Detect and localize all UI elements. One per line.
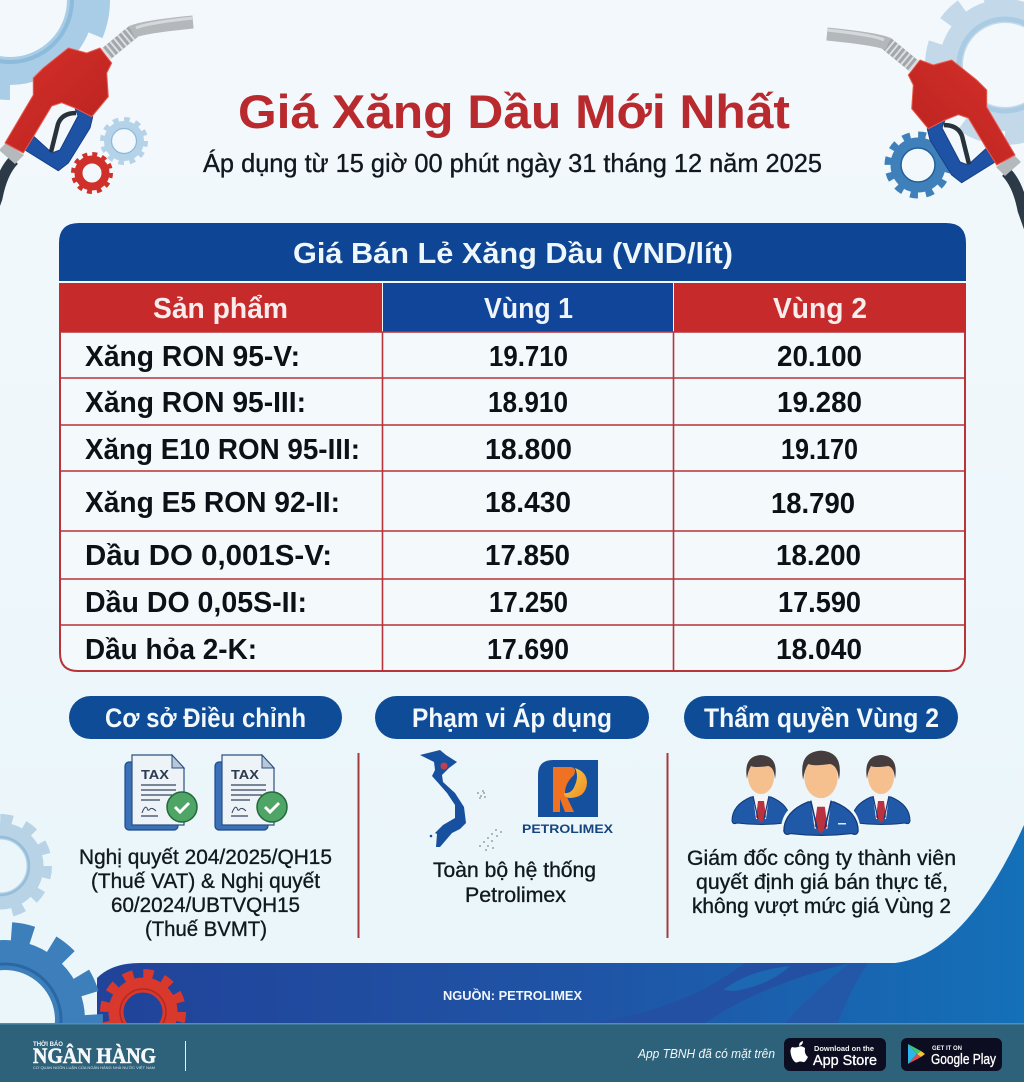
row: Dầu DO 0,05S-II: 17.250 <box>489 587 568 619</box>
row: Dầu hỏa 2-K: 17.690 <box>487 634 569 666</box>
text block <box>433 859 596 907</box>
footer logo: NGÂN HÀNG <box>33 1043 156 1068</box>
row: Xăng E10 RON 95-III: 19.170 <box>781 434 858 466</box>
heading pill: Thẩm quyền Vùng 2 <box>704 703 939 733</box>
row: Xăng E10 RON 95-III: Xăng E10 RON 95-III: <box>85 434 360 466</box>
row: Xăng RON 95-III: 18.910 <box>488 387 568 419</box>
text block: quyết định giá bán thực tế, <box>696 871 948 894</box>
table column headers: Vùng 2 <box>773 293 867 325</box>
heading pill <box>375 696 649 739</box>
icon: tax document 2 <box>215 755 287 830</box>
subtitle: Áp dụng từ 15 giờ 00 phút ngày 31 tháng 12 năm 2025 <box>203 148 822 178</box>
bottom blue wave <box>97 825 1024 1024</box>
Google Play badge: GET IT ON <box>932 1045 962 1052</box>
gear: lower left big blue <box>0 932 93 1082</box>
table grid <box>60 332 965 671</box>
heading pill <box>684 696 958 739</box>
row: Dầu DO 0,001S-V: 17.850 <box>485 540 570 572</box>
gear: right blue <box>888 135 948 195</box>
text block: (Thuế VAT) & Nghị quyết <box>91 870 320 893</box>
App Store badge: Download on the <box>814 1044 874 1053</box>
row: Xăng E5 RON 92-II: 18.790 <box>771 488 855 520</box>
footer logo: CƠ QUAN NGÔN LUẬN CỦA NGÂN HÀNG NHÀ NƯỚC VIỆT NAM <box>33 1065 155 1070</box>
heading pill <box>69 696 342 739</box>
icon: Vietnam map <box>420 750 502 851</box>
band swoosh decoration <box>589 963 868 1023</box>
table column headers <box>59 283 966 332</box>
row: Xăng RON 95-III: Xăng RON 95-III: <box>85 387 306 419</box>
text block: Petrolimex <box>465 884 567 907</box>
row: Xăng E5 RON 92-II: Xăng E5 RON 92-II: <box>85 487 340 519</box>
source note: NGUỒN: PETROLIMEX <box>443 988 583 1003</box>
row: Dầu hỏa 2-K <box>85 634 862 666</box>
panel: Cơ sở Điều chỉnh <box>69 696 342 941</box>
row: Xăng E10 RON 95-III <box>85 434 858 466</box>
table column headers: Vùng 1 <box>484 293 573 325</box>
gear: lower red <box>105 974 181 1050</box>
row: Dầu DO 0,05S-II: Dầu DO 0,05S-II: <box>85 587 307 619</box>
text block: Toàn bộ hệ thống <box>433 859 596 882</box>
icon: tax document 1 <box>125 755 197 830</box>
row: Xăng RON 95-V: Xăng RON 95-V: <box>85 341 300 373</box>
icon: Petrolimex logo <box>522 760 613 836</box>
text block: 60/2024/UBTVQH15 <box>111 894 300 917</box>
footer bar <box>0 1023 1024 1082</box>
heading pill: Cơ sở Điều chỉnh <box>105 703 306 733</box>
icon: fuel nozzle right <box>827 30 1024 244</box>
gear: top right <box>933 0 1024 137</box>
row: Dầu DO 0,05S-II: 17.590 <box>778 587 861 619</box>
table column headers: Sản phẩm <box>153 293 288 325</box>
row: Dầu DO 0,001S-V: Dầu DO 0,001S-V: <box>85 540 332 572</box>
gear: small red <box>74 154 110 192</box>
text block: Giám đốc công ty thành viên <box>687 847 956 870</box>
Google Play badge: Google Play <box>931 1051 996 1068</box>
row: Xăng RON 95-V <box>85 341 862 373</box>
row: Xăng RON 95-III: 19.280 <box>777 387 862 419</box>
row: Dầu DO 0,001S-V: 18.200 <box>776 540 861 572</box>
gear: lower left light <box>0 819 47 913</box>
panel: Phạm vi Áp dụng <box>375 696 649 907</box>
gear: small light blue <box>102 120 146 162</box>
row: Xăng E5 RON 92-II <box>85 487 855 520</box>
Google Play badge <box>901 1038 1002 1071</box>
row: Xăng RON 95-III <box>85 387 862 419</box>
gear: top left <box>0 0 102 92</box>
row: Xăng E10 RON 95-III: 18.800 <box>485 434 572 466</box>
row: Xăng RON 95-V: 19.710 <box>489 341 568 373</box>
text block: Nghị quyết 204/2025/QH15 <box>79 846 332 869</box>
row: Xăng E5 RON 92-II: 18.430 <box>485 487 571 519</box>
text block: không vượt mức giá Vùng 2 <box>692 895 951 918</box>
row: Dầu hỏa 2-K: 18.040 <box>776 634 862 666</box>
icon: Petrolimex logo: PETROLIMEX <box>522 824 613 836</box>
row: Dầu DO 0,001S-V <box>85 540 861 572</box>
panel: price table <box>59 223 966 671</box>
row: Xăng RON 95-V: 20.100 <box>777 341 862 373</box>
row: Dầu hỏa 2-K: Dầu hỏa 2-K: <box>85 634 257 666</box>
icon: fuel nozzle left <box>0 18 193 232</box>
text block: (Thuế BVMT) <box>145 918 267 941</box>
panel: Thẩm quyền Vùng 2 <box>684 696 958 918</box>
text block <box>687 847 956 918</box>
footer logo: THỜI BÁO <box>33 1039 63 1048</box>
table title bar: Giá Bán Lẻ Xăng Dầu (VND/lít) <box>293 238 733 270</box>
table title bar <box>59 223 966 281</box>
heading pill: Phạm vi Áp dụng <box>412 702 612 733</box>
title: Giá Xăng Dầu Mới Nhất <box>238 85 790 138</box>
icon: three managers <box>732 751 910 838</box>
App Store badge: App Store <box>813 1052 877 1069</box>
App Store badge <box>784 1038 886 1071</box>
text block <box>79 846 332 941</box>
app availability text: App TBNH đã có mặt trên <box>637 1046 775 1061</box>
row: Dầu DO 0,05S-II <box>85 587 861 619</box>
